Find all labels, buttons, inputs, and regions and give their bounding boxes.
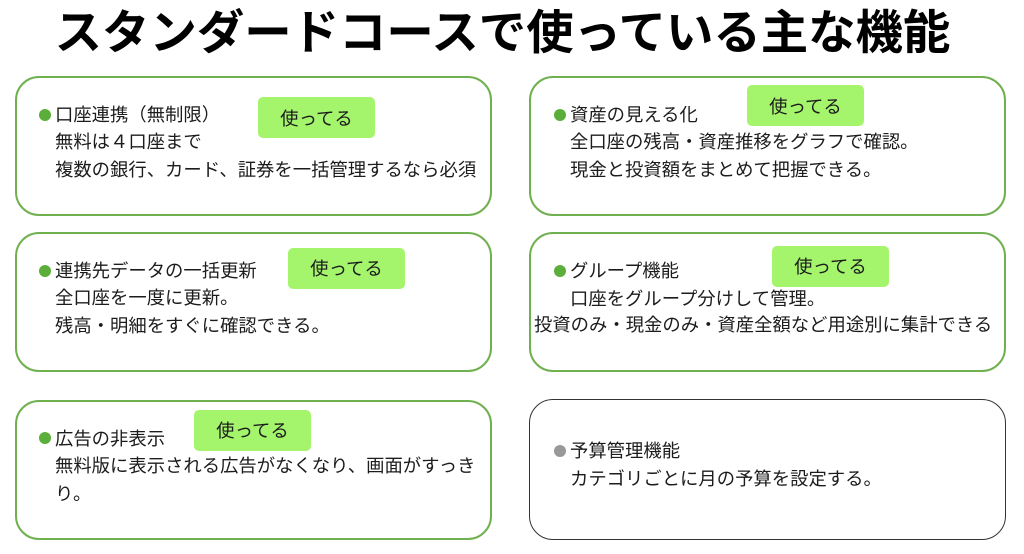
text: budget description: カテゴリごとに月の予算を設定する。 [570, 468, 882, 489]
heading: budget management: 予算管理機能 [570, 440, 680, 461]
panel: bulk update [15, 232, 492, 372]
heading: account linking: 口座連携（無制限） [55, 104, 220, 125]
bullet [554, 109, 566, 121]
heading: asset visibility: 資産の見える化 [570, 104, 698, 125]
bullet [39, 265, 51, 277]
panel: ad removal [15, 400, 492, 540]
badge: in use: 使ってる [280, 108, 353, 129]
panel: asset visibility [529, 76, 1006, 216]
text: ad description: 無料版に表示される広告がなくなり、画面がすっき [55, 455, 475, 476]
bullet [554, 445, 566, 457]
heading: group feature: グループ機能 [570, 260, 679, 281]
badge: in use: 使ってる [769, 96, 842, 117]
badge: in use [288, 248, 405, 289]
badge: in use [258, 97, 375, 138]
bullet [554, 265, 566, 277]
badge: in use [747, 85, 864, 126]
badge: in use [194, 410, 311, 451]
text: free limit: 無料は４口座まで [55, 131, 202, 152]
badge: in use: 使ってる [794, 256, 867, 277]
badge: in use: 使ってる [310, 258, 383, 279]
badge: in use: 使ってる [216, 420, 289, 441]
text: ad description continued: り。 [55, 483, 91, 504]
badge: in use [772, 246, 889, 287]
text: balance description: 残高・明細をすぐに確認できる。 [55, 315, 330, 336]
title: スタンダードコースで使っている主な機能 [55, 7, 950, 60]
bullet [39, 432, 51, 444]
panel: group feature [529, 232, 1006, 372]
text: update description: 全口座を一度に更新。 [55, 287, 238, 308]
text: grouping description: 口座をグループ分けして管理。 [570, 288, 825, 309]
panel: budget management [529, 399, 1006, 540]
text: graph description: 全口座の残高・資産推移をグラフで確認。 [570, 131, 919, 152]
heading: ad removal: 広告の非表示 [55, 428, 165, 449]
heading: bulk update: 連携先データの一括更新 [55, 260, 257, 281]
bullet [39, 109, 51, 121]
panel: account linking [15, 76, 492, 216]
text: totals description: 現金と投資額をまとめて把握できる。 [570, 159, 881, 180]
text: description: 複数の銀行、カード、証券を一括管理するなら必須 [55, 159, 476, 180]
text: aggregation description: 投資のみ・現金のみ・資産全額など用途別に集計できる [534, 314, 992, 335]
